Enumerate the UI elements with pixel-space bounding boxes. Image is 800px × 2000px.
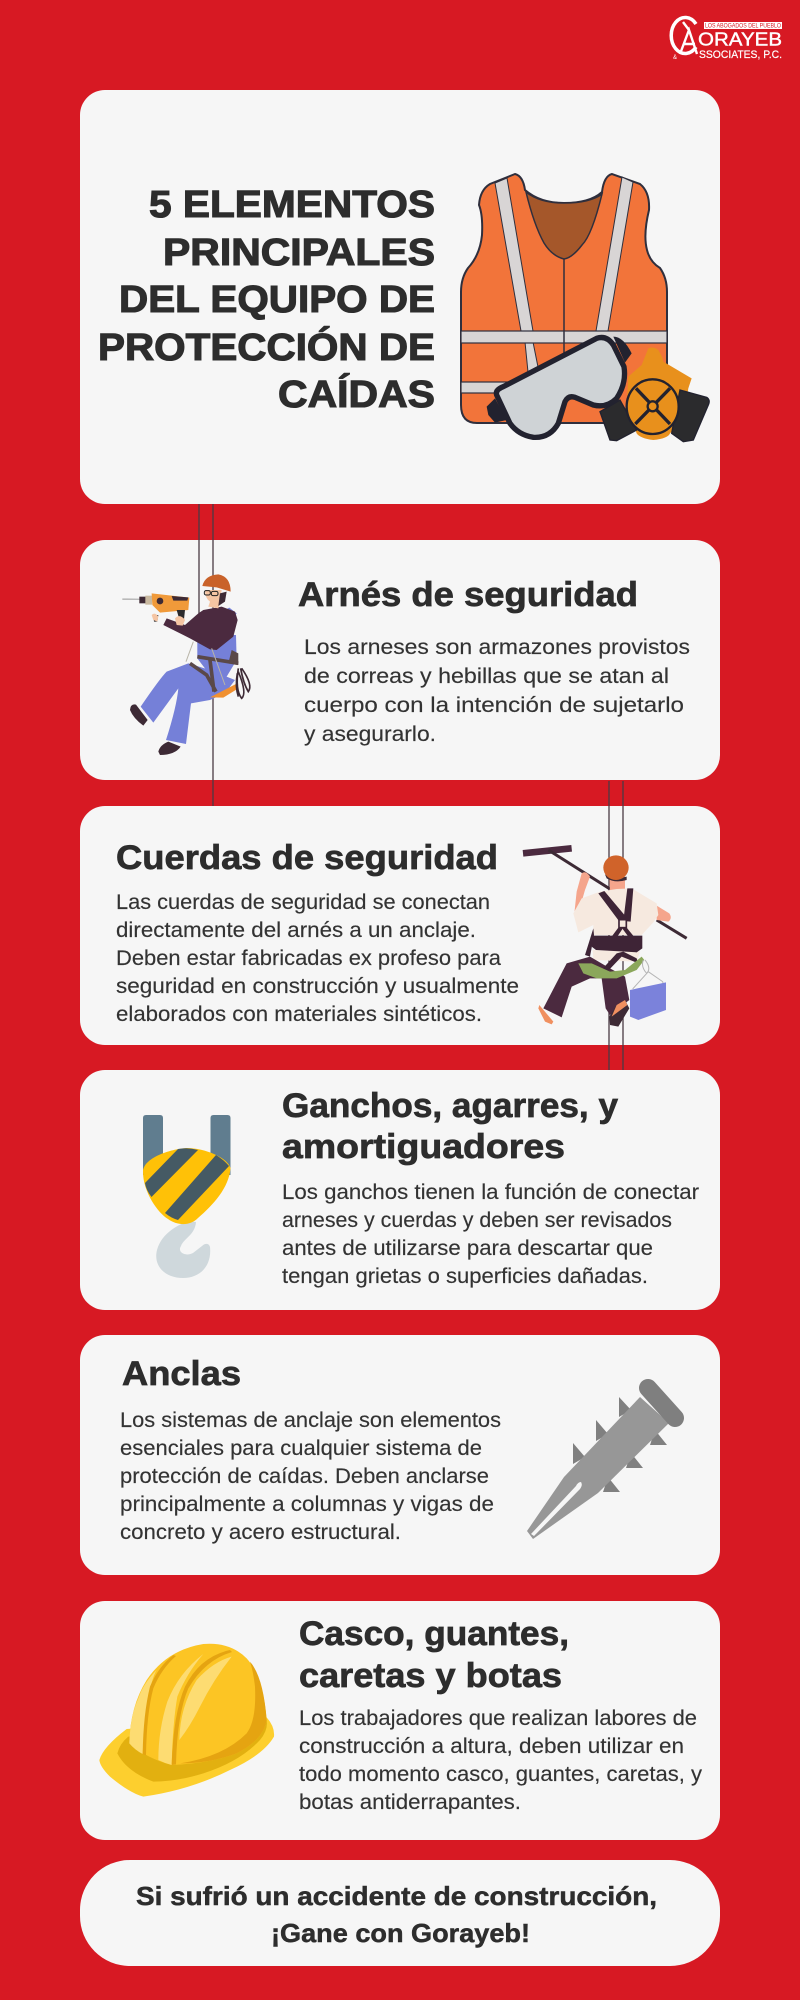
heading: Arnés de seguridad bbox=[298, 576, 638, 614]
text block bbox=[116, 891, 519, 1026]
text block: protección de caídas. Deben anclarse bbox=[120, 1465, 489, 1488]
text block: botas antiderrapantes. bbox=[299, 1791, 521, 1814]
heading: Anclas bbox=[122, 1355, 241, 1393]
heading: caretas y botas bbox=[299, 1657, 562, 1695]
title: PROTECCIÓN DE bbox=[98, 325, 435, 369]
heading: Ganchos, agarres, y bbox=[282, 1087, 618, 1125]
illustration: worker with drill on ropes bbox=[122, 504, 250, 806]
text block: de correas y hebillas que se atan al bbox=[304, 665, 669, 688]
icon: safety vest, goggles and respirator bbox=[461, 174, 709, 442]
text block: Deben estar fabricadas ex profeso para bbox=[116, 947, 501, 970]
panel: casco, guantes bbox=[80, 1601, 720, 1840]
panel: ganchos bbox=[80, 1070, 720, 1310]
text block: seguridad en construcción y usualmente bbox=[116, 975, 519, 998]
logo: Gorayeb & Associates: SSOCIATES, P.C. bbox=[699, 49, 782, 61]
logo: Gorayeb & Associates: & bbox=[673, 55, 677, 61]
logo: Gorayeb & Associates bbox=[671, 18, 782, 61]
illustration: window-cleaning worker on ropes bbox=[523, 781, 687, 1070]
text block bbox=[282, 1181, 699, 1288]
text block: cuerpo con la intención de sujetarlo bbox=[304, 694, 684, 717]
title: PRINCIPALES bbox=[163, 232, 435, 274]
panel: cuerdas de seguridad bbox=[80, 806, 720, 1045]
call to action: ¡Gane con Gorayeb! bbox=[271, 1918, 530, 1948]
logo: Gorayeb & Associates: ORAYEB bbox=[698, 30, 782, 50]
text block: concreto y acero estructural. bbox=[120, 1521, 401, 1544]
call to action bbox=[80, 1860, 720, 1966]
text block: antes de utilizarse para descartar que bbox=[282, 1237, 653, 1260]
text block bbox=[299, 1707, 703, 1814]
heading bbox=[299, 1615, 569, 1695]
text block: Los sistemas de anclaje son elementos bbox=[120, 1409, 501, 1432]
heading: Cuerdas de seguridad bbox=[116, 839, 498, 877]
text block: Los trabajadores que realizan labores de bbox=[299, 1707, 697, 1730]
title bbox=[98, 184, 435, 416]
icon: yellow hard hat bbox=[99, 1644, 274, 1797]
text block: arneses y cuerdas y deben ser revisados bbox=[282, 1209, 672, 1232]
text block: principalmente a columnas y vigas de bbox=[120, 1493, 494, 1516]
title: CAÍDAS bbox=[278, 372, 435, 416]
text block: Los arneses son armazones provistos bbox=[304, 636, 690, 659]
text block: esenciales para cualquier sistema de bbox=[120, 1437, 482, 1460]
logo: Gorayeb & Associates: LOS ABOGADOS DEL PUEBLO bbox=[705, 23, 781, 30]
text block: elaborados con materiales sintéticos. bbox=[116, 1003, 482, 1026]
icon: anchor bolt bbox=[527, 1388, 675, 1539]
text block bbox=[120, 1409, 501, 1544]
panel: title bbox=[80, 90, 720, 504]
text block: tengan grietas o superficies dañadas. bbox=[282, 1265, 648, 1288]
panel: anclas bbox=[80, 1335, 720, 1575]
icon: crane hook bbox=[143, 1115, 230, 1278]
heading: amortiguadores bbox=[282, 1128, 565, 1166]
heading bbox=[282, 1087, 618, 1166]
text block bbox=[304, 636, 690, 746]
title: 5 ELEMENTOS bbox=[149, 184, 435, 226]
panel: arnés de seguridad bbox=[80, 540, 720, 780]
text block: directamente del arnés a un anclaje. bbox=[116, 919, 476, 942]
text block: construcción a altura, deben utilizar en bbox=[299, 1735, 684, 1758]
call to action: Si sufrió un accidente de construcción, bbox=[136, 1881, 657, 1911]
title: DEL EQUIPO DE bbox=[119, 279, 435, 321]
heading: Casco, guantes, bbox=[299, 1615, 569, 1653]
text block: todo momento casco, guantes, caretas, y bbox=[299, 1763, 703, 1786]
text block: Las cuerdas de seguridad se conectan bbox=[116, 891, 490, 914]
text block: y asegurarlo. bbox=[304, 723, 436, 746]
text block: Los ganchos tienen la función de conectar bbox=[282, 1181, 699, 1204]
